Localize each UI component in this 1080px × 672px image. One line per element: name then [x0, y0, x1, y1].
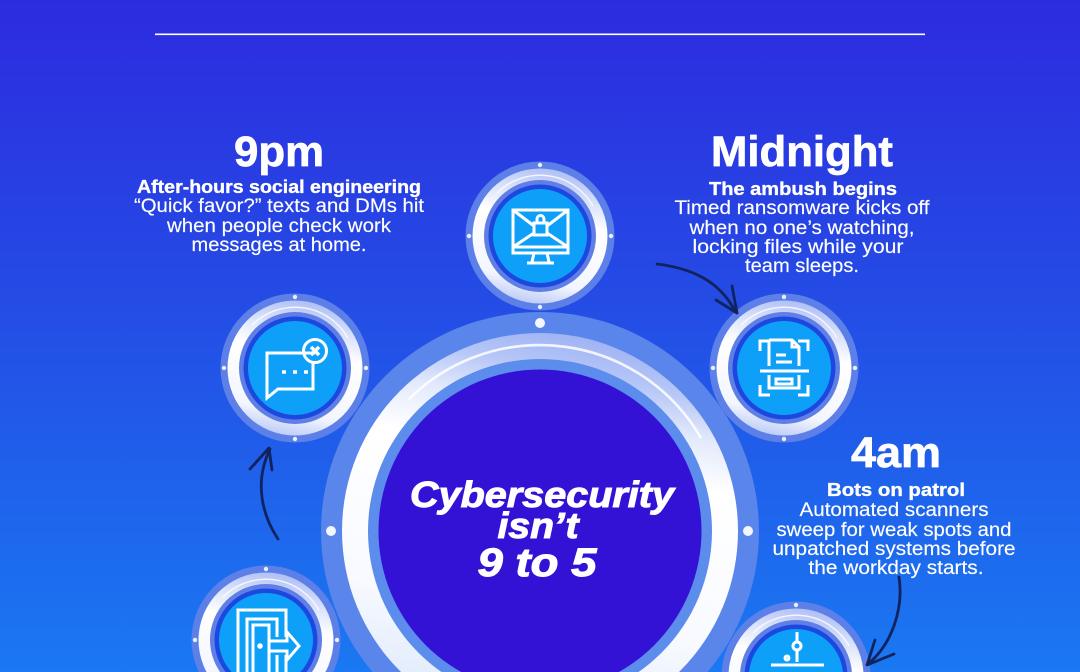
text block: 4am: unpatched systems before [772, 539, 1016, 560]
text block: 4am: the workday starts. [808, 558, 984, 579]
text block: 9pm: “Quick favor?” texts and DMs hit [134, 196, 425, 217]
header rule [155, 34, 925, 35]
text block: Midnight [674, 128, 930, 277]
hub ring highlight [408, 345, 701, 438]
text block: 9pm: After-hours social engineering [137, 177, 421, 197]
hub core [378, 370, 702, 672]
hub connector dots [326, 318, 753, 536]
arrow: top to right node [657, 264, 737, 313]
arrow: bottom-left to left node [250, 448, 278, 539]
text block: 4am [772, 429, 1016, 579]
node: bottom-right, network [722, 602, 870, 672]
icon: chat bubble with cross [267, 340, 326, 398]
central hub [321, 312, 759, 672]
node: right, document scan [710, 294, 858, 442]
node: top, monitor with lock [466, 162, 614, 310]
text block: Midnight: team sleeps. [745, 256, 859, 277]
node: bottom-left, exit door [192, 566, 340, 672]
node: left, message with x [220, 294, 370, 442]
hub title: Cybersecurity [410, 474, 676, 515]
hub title: isn’t [498, 505, 581, 546]
text block: 4am: Bots on patrol [827, 480, 965, 500]
text block: 9pm [134, 128, 425, 256]
text block: 9pm: when people check work [166, 216, 392, 237]
text block: Midnight: The ambush begins [709, 179, 897, 199]
hub outer ring [321, 312, 759, 672]
icon: document scanner [760, 340, 809, 395]
text block: Midnight: Midnight [711, 128, 893, 176]
hub title [410, 474, 676, 585]
arrow: 4am text to bottom-right node [867, 577, 900, 665]
text block: 9pm: 9pm [234, 128, 324, 176]
hub inner ring [368, 359, 712, 672]
icon: locked monitor [513, 210, 568, 263]
text block: 4am: 4am [851, 429, 941, 477]
icon: door with arrow [238, 610, 299, 672]
text block: Midnight: when no one’s watching, [688, 218, 914, 239]
text block: 4am: Automated scanners [800, 500, 988, 521]
text block: Midnight: Timed ransomware kicks off [674, 198, 930, 219]
text block: Midnight: locking files while your [692, 237, 904, 258]
icon: network node [771, 632, 824, 665]
hub white ring [342, 333, 738, 672]
hub title: 9 to 5 [478, 541, 597, 585]
text block: 4am: sweep for weak spots and [776, 520, 1012, 541]
text block: 9pm: messages at home. [192, 235, 366, 256]
